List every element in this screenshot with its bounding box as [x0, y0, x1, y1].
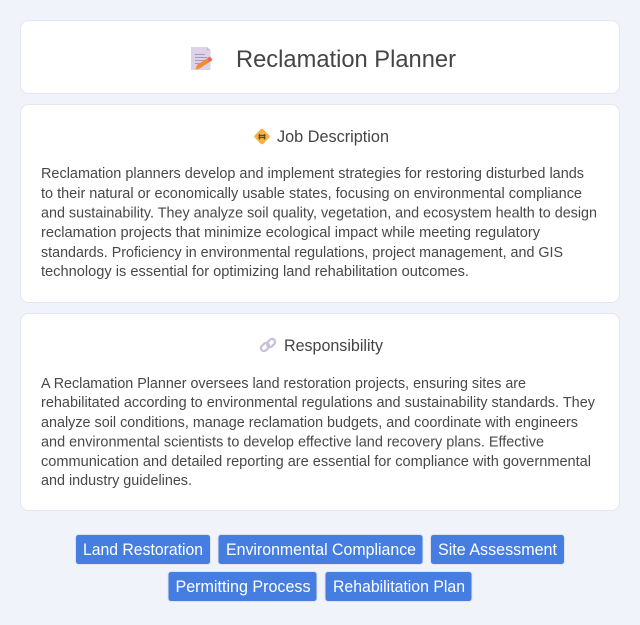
tag: land restoration: Land Restoration: [83, 541, 203, 559]
job description text: to their natural or economically usable states, focusing on environmental compliance: [41, 186, 582, 202]
tag: rehabilitation plan: [325, 572, 472, 602]
tag: site assessment: Site Assessment: [438, 541, 557, 559]
responsibility text: [41, 376, 596, 489]
panel: title header: [20, 20, 620, 94]
tag: land restoration: [76, 534, 210, 564]
responsibility text: and industry guidelines.: [41, 473, 192, 489]
job description text: standards. Proficiency in environmental regulations, project management, and GIS: [41, 245, 563, 261]
panel: job description: [20, 104, 620, 302]
title: Reclamation Planner: [236, 46, 456, 73]
heading: job description: Job Description: [277, 128, 389, 146]
job description text: and sustainability. They analyze soil quality, vegetation, and ecosystem health to design: [41, 206, 597, 222]
job description text: [41, 166, 597, 280]
tag: environmental compliance: Environmental Compliance: [226, 541, 416, 559]
tag: permitting process: Permitting Process: [176, 578, 310, 596]
responsibility text: and environmental scientists to develop effective land recovery plans. Effective: [41, 434, 544, 450]
tag: permitting process: [168, 572, 317, 602]
tags: [76, 534, 564, 602]
job description text: Reclamation planners develop and implement strategies for restoring disturbed lands: [41, 166, 584, 182]
tag: rehabilitation plan: Rehabilitation Plan: [333, 578, 465, 596]
responsibility text: A Reclamation Planner oversees land restoration projects, ensuring sites are: [41, 376, 526, 392]
heading: responsibility: Responsibility: [284, 337, 384, 355]
icon: document with pencil: [191, 47, 212, 70]
job description text: reclamation projects that minimize ecological impact while meeting regulatory: [41, 225, 541, 241]
responsibility text: communication and detailed reporting are essential for compliance with governmental: [41, 454, 591, 470]
tag: environmental compliance: [218, 534, 423, 564]
responsibility text: rehabilitated according to environmental regulations and sustainability standards. They: [41, 395, 596, 411]
panel: responsibility: [20, 314, 620, 510]
icon: construction diamond: [254, 128, 270, 145]
responsibility text: analyze soil conditions, manage reclamation budgets, and coordinate with engineers: [41, 415, 578, 431]
tag: site assessment: [430, 534, 564, 564]
job description text: technology is essential for optimizing land rehabilitation outcomes.: [41, 264, 469, 280]
icon: chain link: [260, 338, 276, 352]
